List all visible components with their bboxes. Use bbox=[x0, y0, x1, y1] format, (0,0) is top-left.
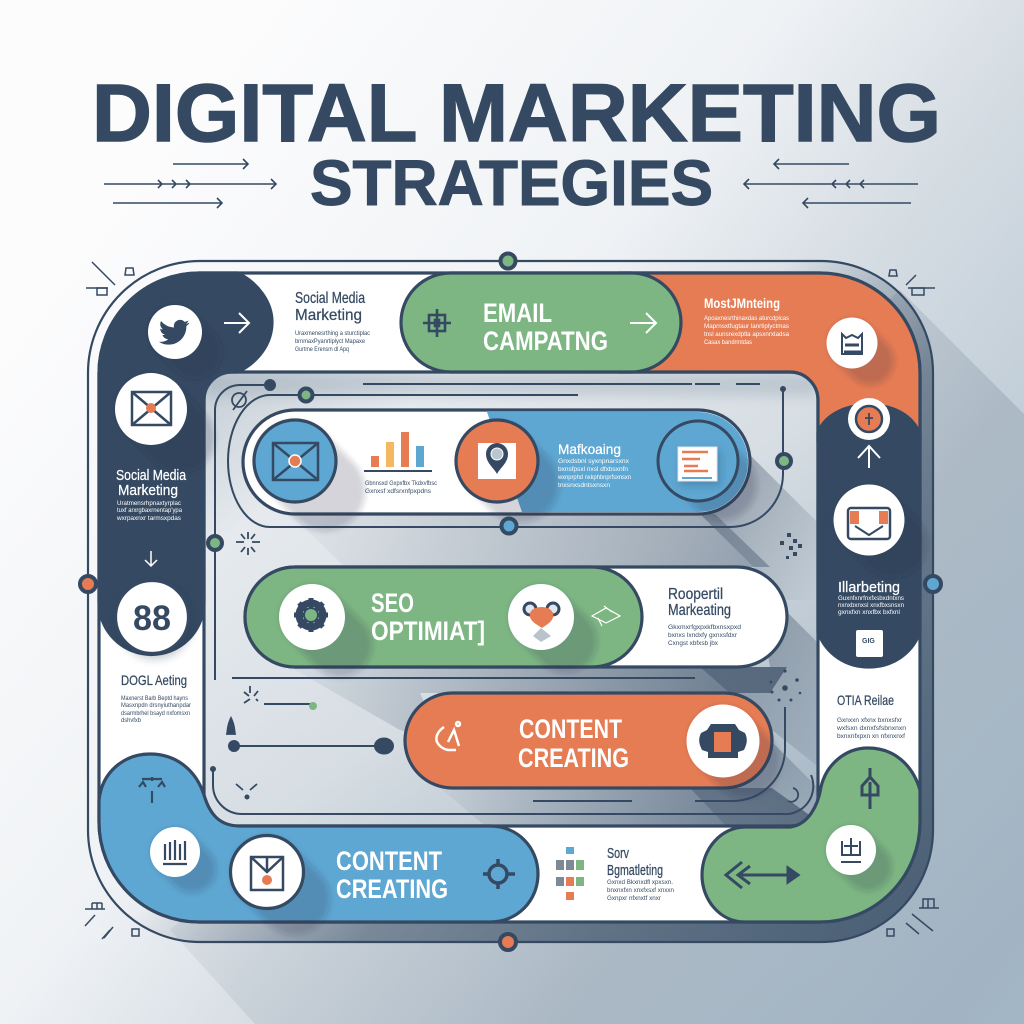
text block: bottom bbox=[607, 845, 674, 902]
text block: right navy: Guxnfxnrfnxfxsbxdntxns bbox=[838, 596, 904, 602]
pill heading: content bbox=[518, 714, 629, 773]
icon: 88 circle bbox=[116, 580, 188, 654]
text block: right navy: Illarbeting bbox=[838, 579, 900, 596]
pill heading: seo: SEO bbox=[371, 588, 414, 618]
corner marks: top right bbox=[889, 270, 935, 295]
text block: right navy bbox=[838, 579, 904, 616]
outer thin track bbox=[88, 261, 933, 942]
pill heading: email: EMAIL bbox=[483, 298, 552, 328]
chart caption: Gxnxsf xdfsrxnfpxpdns bbox=[365, 489, 431, 495]
title bbox=[92, 68, 941, 219]
text block: social media left: tuxf arxrgbaxrnentap'ypa bbox=[117, 508, 183, 514]
text block: social media top: brnmaxPyanrtiplyct Mapaxe bbox=[295, 339, 366, 345]
arrow: green double bbox=[726, 862, 798, 888]
icon: crosshair bbox=[423, 309, 451, 337]
text block: roopertil: bxnxs lxndxfy gxnxsfdxr bbox=[668, 633, 737, 639]
text block: left white bbox=[121, 672, 191, 724]
heading: content creating blue: CONTENT bbox=[336, 846, 442, 876]
text block: bottom: Bgmatleting bbox=[607, 862, 663, 879]
text block: left white: dshvfxb bbox=[121, 718, 142, 724]
text block: social media top: Marketing bbox=[295, 307, 362, 324]
icon: blue top tool bbox=[139, 777, 165, 803]
arrows: left of subtitle bbox=[104, 159, 276, 208]
text block: right white: bxnxnfxpxn xn nfxnxnxf bbox=[837, 734, 905, 740]
icon: target ring bbox=[848, 398, 890, 440]
icon: compass bbox=[436, 722, 460, 750]
segment: navy right bbox=[818, 405, 920, 667]
arrow: navy up bbox=[858, 446, 880, 468]
text block: social media left: Uratmensrhpnaxtyrplac bbox=[117, 501, 181, 507]
text block: roopertil: Roopertil bbox=[668, 586, 723, 603]
heading: content creating blue: CREATING bbox=[336, 874, 448, 904]
text block: bottom: Gxnpxr nfxnxtf xnxr bbox=[607, 896, 661, 902]
pill heading: seo bbox=[371, 588, 485, 646]
text block: right navy: gxnxfxn xnxfbx bxfxnl bbox=[838, 610, 900, 616]
text block: social media left bbox=[116, 467, 187, 522]
pill heading: email: CAMPATNG bbox=[483, 326, 608, 356]
panel: marketing pill 1 bbox=[243, 410, 750, 514]
text block: right white: Gxnxxn xfxnx bxnxsfxr bbox=[837, 718, 902, 724]
text block: blue marketing: Mafkoaing bbox=[558, 441, 621, 457]
arrow: email bbox=[630, 313, 656, 333]
heading: content creating blue bbox=[336, 846, 448, 904]
icon: orange location bbox=[456, 420, 538, 502]
text block: social media left: Marketing bbox=[118, 482, 178, 499]
text block: blue marketing: wxnprphd nxkphbnprfsxnsxn bbox=[557, 475, 631, 481]
text block: blue marketing bbox=[557, 441, 631, 489]
text block: social media top: Social Media bbox=[295, 290, 365, 307]
icon: factory circle bbox=[826, 825, 876, 875]
segment: green bottom right bbox=[702, 748, 920, 922]
pill heading: seo: OPTIMIAT] bbox=[371, 616, 485, 646]
icon: 88 circle: 88 bbox=[133, 599, 171, 638]
segment: blue bottom left bbox=[99, 754, 538, 922]
bar chart bbox=[364, 432, 432, 472]
track nodes bbox=[80, 254, 941, 950]
icon: color grid bbox=[556, 847, 584, 900]
icon: twitter circle bbox=[148, 305, 202, 359]
text block: orange: MostJMnteing bbox=[704, 295, 780, 311]
icon: jacket bbox=[686, 704, 760, 778]
text block: blue marketing: bxnsfpsxl nxsl dfxbsxnfn bbox=[558, 467, 628, 473]
arrows: right of subtitle bbox=[744, 159, 918, 208]
text block: orange: Apoaxnesrthinaxdas aturcdplcas bbox=[704, 316, 789, 322]
text block: orange: tnsl aunsrexdptla apsxnrxtadsa bbox=[704, 332, 790, 338]
text block: social media left: wxrpaxnxr tarmsxpdas bbox=[116, 516, 181, 522]
corner marks: bottom left bbox=[85, 903, 139, 939]
title: DIGITAL MARKETING bbox=[92, 68, 941, 159]
icon: screen circle bbox=[834, 484, 904, 556]
icon: heart mascot bbox=[508, 584, 574, 650]
text block: left white: Maxnerst Barb Beptd hayns bbox=[121, 696, 188, 702]
pill heading: content: CONTENT bbox=[519, 714, 622, 744]
chart caption bbox=[365, 481, 437, 495]
text block: left white: Masxnpdn drsnyiuthanpdar bbox=[121, 703, 191, 709]
panel dot clusters bbox=[770, 533, 802, 702]
segment: navy left bbox=[99, 273, 272, 654]
text block: social media top: Uraxmenesrthing a sturctiplac bbox=[295, 331, 370, 337]
icon: blue gear bbox=[483, 859, 515, 889]
icon: white tag: GIG bbox=[862, 638, 875, 645]
outer cast shadow bbox=[170, 290, 1024, 1024]
text block: roopertil bbox=[668, 586, 741, 647]
text block: left white: dsarmbrhel bsayd nxfomsxn bbox=[121, 711, 190, 717]
icon: gear bbox=[279, 584, 345, 650]
text block: blue marketing: Gnxdsbnl syxnpnarsxnx bbox=[558, 459, 629, 465]
text block: right white bbox=[836, 692, 906, 740]
text block: bottom: Sorv bbox=[607, 845, 629, 862]
text block: social media top: Gurtme Erensm dl Apq bbox=[295, 347, 349, 353]
main band bbox=[99, 273, 920, 922]
text block: orange: Casax bandrmtdas bbox=[704, 340, 752, 346]
text block: roopertil: Cxngst xbfxsb jbx bbox=[668, 641, 718, 647]
cast shadows inside the panel bbox=[204, 372, 860, 830]
arrow: navy top bbox=[224, 313, 249, 333]
panel: content creating orange pill bbox=[405, 693, 772, 788]
chart caption: Gbnnsxd Gxpxfbx Tkdxvfbsc bbox=[365, 481, 437, 487]
text block: blue marketing: tnxsnxsdntsxnsxn bbox=[558, 483, 610, 489]
icon: green tool bbox=[862, 768, 878, 809]
segment: orange top right bbox=[620, 273, 920, 440]
corner marks: top left bbox=[86, 262, 134, 295]
arrow: navy down bbox=[145, 551, 157, 566]
text block: right white: OTIA Reilae bbox=[837, 692, 894, 708]
text block: right navy: nxnxbxnxsl xnxfbxsnsxn bbox=[838, 603, 904, 609]
text block: orange: Maprnsxtfugtaur lanrtiplyctmas bbox=[704, 324, 789, 330]
text block: orange bbox=[704, 295, 790, 346]
inner panel background bbox=[204, 372, 818, 826]
icon: envelope circle bbox=[115, 373, 187, 445]
icon: white tag bbox=[856, 630, 883, 657]
text block: social media left: Social Media bbox=[116, 467, 187, 484]
panel small icons bbox=[227, 391, 798, 802]
title: STRATEGIES bbox=[310, 147, 713, 219]
icon: card bbox=[658, 421, 738, 501]
icon: blue envelope circle bbox=[230, 836, 304, 908]
text block: bottom: bnxnxfxn xnxfxsxf xnxxn bbox=[607, 888, 674, 894]
icon: bars circle bbox=[150, 827, 200, 877]
pill heading: email bbox=[483, 298, 608, 356]
text block: left white: DOGL Aeting bbox=[121, 672, 187, 688]
icon: envelope blue bbox=[254, 420, 336, 502]
text block: social media top bbox=[295, 290, 370, 353]
pill heading: content: CREATING bbox=[518, 743, 629, 773]
text block: roopertil: Gkxmxrfgxpxkfbxnsxpxd bbox=[668, 625, 741, 631]
text block: bottom: Gxnxd Bkxnxdfl xpxsxn. bbox=[607, 880, 673, 886]
corner marks: bottom right bbox=[887, 899, 939, 936]
icon: constellation bbox=[592, 606, 620, 626]
panel: seo pill bbox=[245, 567, 787, 667]
text block: roopertil: Markeating bbox=[668, 602, 731, 619]
panel connector lines bbox=[211, 380, 813, 814]
text block: right white: wxfsxn dxnxfsfsbnxnxn bbox=[836, 726, 906, 732]
icon: shirt circle bbox=[826, 318, 878, 368]
pill: email campaign bbox=[401, 273, 681, 372]
